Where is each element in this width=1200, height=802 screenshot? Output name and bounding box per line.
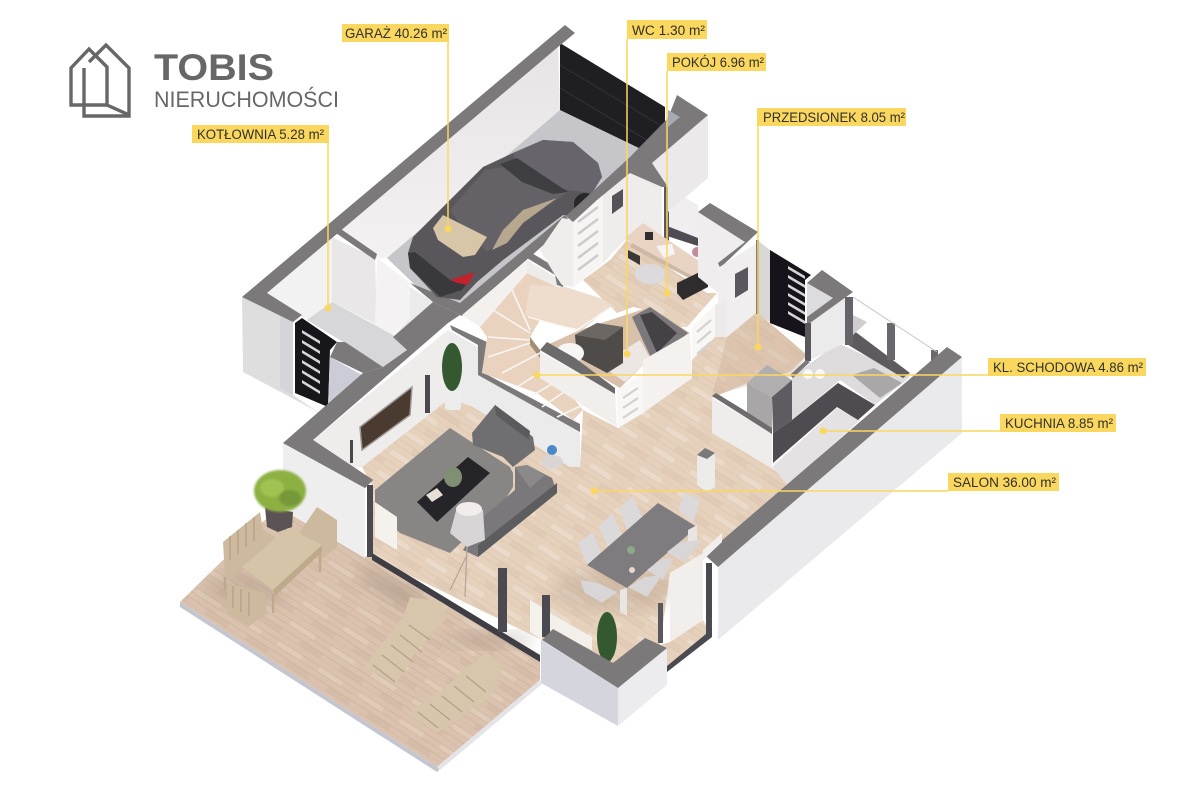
- floor lamp: [450, 502, 485, 597]
- logo wordmark: [154, 47, 339, 112]
- coffee table: [417, 457, 490, 522]
- thin partition top: [333, 227, 377, 260]
- logo wordmark: NIERUCHOMOŚCI: [154, 87, 339, 112]
- block right of window: [698, 205, 757, 293]
- boiler room exterior: [242, 297, 318, 412]
- right wall top: [705, 347, 962, 567]
- sink: [852, 368, 902, 398]
- kitchen floor: [772, 408, 860, 485]
- logo wordmark: TOBIS: [154, 47, 274, 88]
- window sill: [840, 330, 910, 378]
- garage: [242, 25, 665, 322]
- window opening: [667, 190, 698, 240]
- label: WC: WC 1.30 m²: [632, 23, 706, 38]
- framed picture: [612, 189, 623, 214]
- label: Pokój: POKÓJ 6.96 m²: [672, 55, 764, 70]
- label: Kuchnia: [820, 414, 1116, 434]
- right wall exterior: [718, 357, 962, 640]
- curtain left: [375, 502, 397, 550]
- cabinets: [773, 383, 875, 463]
- outer wall top: [242, 25, 575, 322]
- peninsula wall: [712, 398, 772, 468]
- terrace deck: [180, 510, 542, 772]
- label: Salon: [590, 473, 1059, 494]
- side face: [328, 357, 362, 407]
- logo icon: house outlines: [71, 45, 129, 116]
- label: Pokój: [664, 53, 766, 296]
- entry door: [295, 318, 337, 407]
- entrance door: [756, 240, 811, 337]
- label: Przedsionek: [754, 108, 906, 350]
- label: Klatka schodowa: [534, 358, 1146, 378]
- white door and wall: [540, 218, 573, 287]
- label: Garaż: GARAŻ 40.26 m²: [345, 26, 447, 41]
- tile column: [575, 323, 623, 373]
- main wooden floor: [362, 312, 807, 668]
- floor: [583, 240, 717, 327]
- exterior block: [652, 115, 708, 212]
- far chair: [300, 507, 337, 560]
- wall block right of door: [810, 298, 845, 360]
- front band: [410, 215, 570, 316]
- label: Klatka schodowa: KL. SCHODOWA 4.86 m²: [993, 360, 1143, 375]
- label: Kuchnia: KUCHNIA 8.85 m²: [1005, 416, 1113, 431]
- armchair sofa: [472, 405, 535, 467]
- boiler room back wall: [267, 237, 332, 320]
- partition wall face: [332, 237, 377, 325]
- side table: [541, 445, 563, 469]
- garage back wall: [338, 47, 560, 258]
- WC room: [540, 300, 727, 428]
- garage floor: [387, 110, 643, 316]
- label: Kotłownia: KOTŁOWNIA 5.28 m²: [197, 127, 324, 142]
- car: [408, 140, 602, 300]
- outside paving: [853, 315, 867, 335]
- front wall: [540, 352, 617, 427]
- outdoor plant: [254, 470, 306, 532]
- counter top: [792, 343, 910, 420]
- garage sectional door: [560, 43, 665, 150]
- label: Kotłownia: [192, 125, 332, 312]
- near chair: [227, 583, 267, 627]
- top band to stairs: [450, 325, 580, 432]
- window posts: [887, 323, 895, 360]
- glazing frame: [372, 553, 540, 662]
- wall inserts: [425, 375, 430, 413]
- logo: [71, 45, 339, 116]
- corner wall block by terrace: [283, 440, 373, 558]
- label: Przedsionek: PRZEDSIONEK 8.05 m²: [763, 110, 905, 125]
- room labels: [192, 20, 1146, 494]
- dining set: [578, 493, 702, 616]
- left wall: [313, 330, 450, 468]
- salon front block: [541, 612, 667, 726]
- label: Salon: SALON 36.00 m²: [953, 475, 1057, 490]
- indoor plant: [442, 343, 462, 410]
- label: WC: [624, 20, 707, 358]
- desk: [625, 223, 708, 300]
- tv panel: [360, 387, 412, 450]
- loungers: [363, 597, 447, 682]
- white door: [375, 258, 410, 335]
- door and right wall: [617, 373, 643, 428]
- stair-side wall: [448, 330, 580, 467]
- stairs: [462, 252, 617, 420]
- curtains and front glazing: [530, 533, 722, 672]
- diagonal top band: [283, 302, 460, 488]
- tall unit: [747, 365, 792, 397]
- kitchen: [697, 270, 962, 640]
- room above stairs: pokój: [540, 95, 758, 337]
- gray top: [566, 95, 708, 222]
- tile floor: [307, 302, 407, 367]
- toilet: [556, 343, 584, 363]
- bowls: [803, 369, 813, 379]
- living room walls: [283, 302, 580, 488]
- label: Garaż: [342, 24, 452, 232]
- corner sofa: [463, 465, 557, 557]
- WC interior floor: [547, 307, 690, 388]
- bench: [223, 512, 275, 577]
- white box: [697, 448, 715, 492]
- table: [242, 528, 322, 590]
- boiler room: [242, 237, 433, 412]
- rug: [375, 428, 513, 553]
- shower basin: [632, 307, 688, 362]
- stair walls: [462, 260, 527, 327]
- terrace furniture: [223, 507, 503, 733]
- gray sill: [330, 342, 383, 373]
